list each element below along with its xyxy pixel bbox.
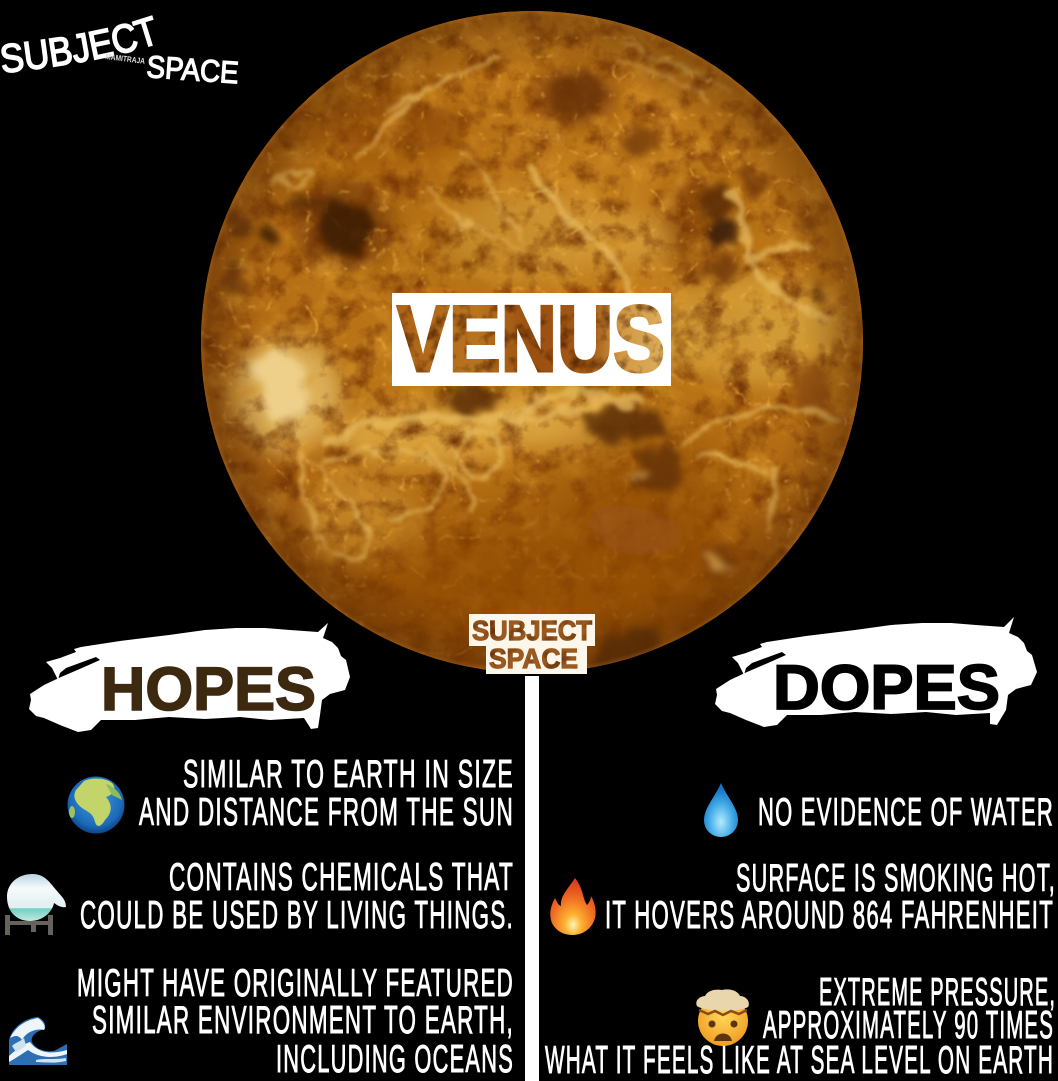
text: might have featured oceans: SIMILAR ENVIRONMENT TO EARTH, [92, 999, 514, 1042]
text: contains chemicals: COULD BE USED BY LIVING THINGS. [80, 894, 514, 937]
text: contains chemicals [80, 856, 514, 937]
shaded southern hemisphere [284, 101, 760, 670]
text: might have featured oceans: INCLUDING OCEANS [276, 1038, 514, 1081]
logo word: Subject: SUBJECT [1, 15, 154, 73]
text: might have featured oceans [77, 962, 514, 1081]
text: extreme pressure [545, 971, 1056, 1081]
brush stroke: Hopes [29, 623, 350, 732]
brush stroke: Dopes [715, 617, 1037, 727]
planet Venus [201, 11, 863, 680]
icon: earth [68, 776, 124, 834]
sign: Subject Space: SUBJECT [472, 615, 592, 646]
sign: Subject Space [469, 614, 595, 674]
text: similar to Earth [139, 753, 514, 834]
heading: Hopes [29, 623, 350, 732]
text: similar to Earth: SIMILAR TO EARTH IN SIZE [183, 753, 514, 796]
title: Venus: VENUS [397, 286, 665, 391]
divider pole [525, 676, 539, 1081]
icon: water drop [704, 783, 738, 837]
heading: Dopes: DOPES [773, 653, 1000, 723]
icon: flask [5, 874, 66, 935]
text: might have featured oceans: MIGHT HAVE ORIGINALLY FEATURED [77, 962, 514, 1005]
text: surface is smoking hot [605, 857, 1056, 937]
text: contains chemicals: CONTAINS CHEMICALS THAT [169, 856, 514, 899]
heading: Hopes: HOPES [101, 655, 316, 723]
logo word: Space: SPACE [146, 49, 240, 90]
icon: wave [9, 1017, 67, 1065]
sign: Subject Space: SPACE [489, 643, 578, 674]
icon: exploding head [696, 989, 749, 1046]
heading: Dopes [715, 617, 1037, 727]
icon: fire [550, 878, 596, 935]
logo word: Mamitraja: MAMITRAJA [105, 52, 146, 66]
logo: Subject Space [1, 15, 240, 90]
text: similar to Earth: AND DISTANCE FROM THE SUN [139, 791, 514, 834]
